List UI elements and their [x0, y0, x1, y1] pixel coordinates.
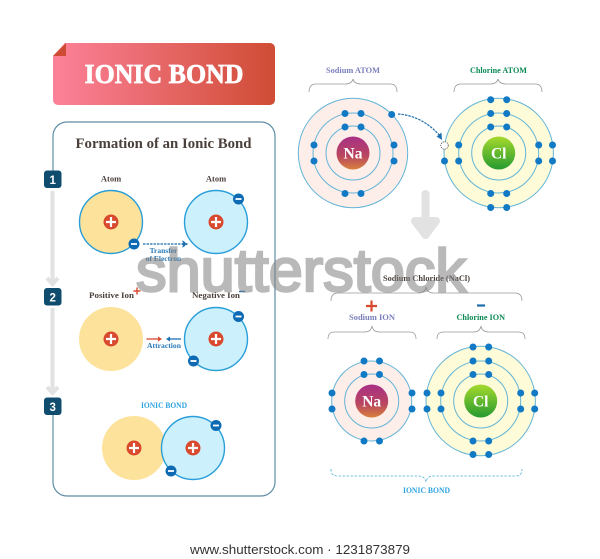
badge 2	[44, 288, 62, 306]
sodium atom diagram: Na	[344, 146, 363, 162]
brace: sodium ion	[328, 326, 416, 339]
icon: minus charge	[477, 304, 485, 307]
label: transfer of electron: Transfer	[150, 246, 178, 255]
label: negative ion: Negative Ion	[192, 290, 240, 300]
chlorine ion diagram: Cl	[473, 394, 489, 410]
arrow: down to result	[415, 194, 436, 235]
label: positive ion: Positive Ion	[89, 290, 134, 300]
atom left with electron	[80, 190, 142, 254]
badge 3: 3	[49, 402, 56, 414]
step arrow 1 to 2	[47, 191, 58, 284]
sodium atom diagram	[298, 98, 408, 208]
brace: chlorine atom	[454, 79, 542, 92]
label: chlorine ion: Chlorine ION	[456, 312, 506, 322]
label: sodium ion: Sodium ION	[349, 312, 396, 322]
bonded ions	[102, 416, 224, 480]
panel heading: Formation of an Ionic Bond	[76, 136, 252, 152]
footer: www.shutterstock.com · 1231873879	[189, 542, 410, 557]
title banner	[53, 43, 275, 105]
label: attraction: Attraction	[147, 341, 182, 350]
label: sodium atom: Sodium ATOM	[326, 65, 380, 75]
sodium ion diagram: Na	[362, 394, 381, 410]
label: positive ion	[89, 288, 140, 300]
chlorine atom diagram: Cl	[491, 146, 507, 162]
label: transfer of electron: of Electron	[146, 254, 182, 263]
brace: ionic bond	[331, 469, 522, 482]
badge 2: 2	[49, 292, 56, 304]
step arrow 2 to 3	[47, 308, 58, 393]
label: atom right: Atom	[206, 174, 226, 184]
label: sodium chloride: Sodium Chloride (NaCl)	[383, 273, 470, 283]
label: ionic bond result: IONIC BOND	[403, 486, 450, 495]
chlorine atom diagram	[441, 96, 556, 211]
brace: sodium atom	[309, 79, 397, 92]
badge 1: 1	[49, 175, 56, 187]
sodium ion diagram	[328, 358, 416, 444]
arrow: electron transfer	[398, 114, 442, 139]
watermark: shutterstock	[136, 237, 467, 304]
chlorine ion diagram	[424, 344, 538, 458]
arrow: transfer of electron	[143, 242, 187, 246]
badge 3	[44, 398, 62, 415]
label: ionic bond: IONIC BOND	[141, 401, 187, 410]
label: chlorine atom: Chlorine ATOM	[470, 65, 527, 75]
title banner: IONIC BOND	[84, 59, 244, 89]
arrows: attraction	[146, 336, 181, 342]
brace: sodium chloride	[331, 287, 522, 301]
badge 1	[44, 170, 62, 188]
atom right with electron	[184, 190, 248, 254]
negative ion	[184, 308, 248, 370]
panel: formation of an ionic bond	[44, 122, 275, 496]
label: atom left: Atom	[101, 174, 121, 184]
brace: chlorine ion	[437, 326, 525, 339]
electron vacancy	[441, 142, 448, 149]
positive ion	[79, 307, 143, 371]
icon: plus charge	[366, 300, 377, 312]
